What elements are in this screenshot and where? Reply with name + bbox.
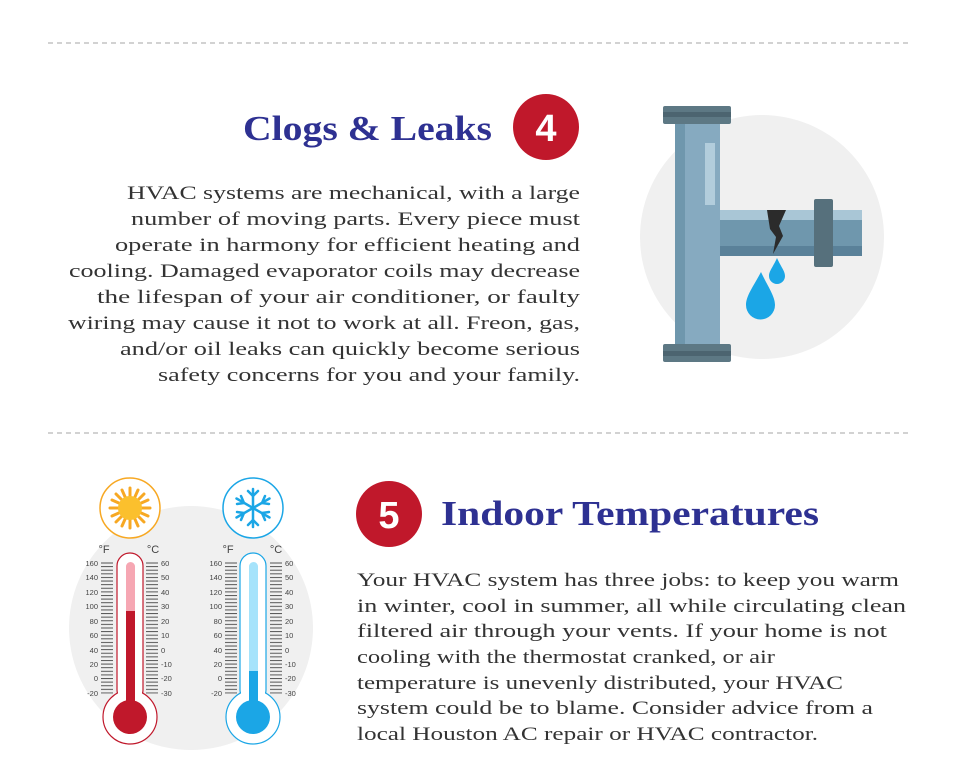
- thermometer: cold: 10: [285, 631, 293, 640]
- thermometer: hot: 0: [161, 646, 165, 655]
- thermometer: hot: 30: [161, 602, 169, 611]
- thermometer: hot: 20: [161, 617, 169, 626]
- thermometer: cold: 30: [285, 602, 293, 611]
- thermometer: cold: 120: [209, 588, 222, 597]
- text block: clogs & leaks: the lifespan of your air conditioner, or faulty: [97, 287, 581, 308]
- thermometer: cold: 160: [209, 559, 222, 568]
- badge 4: [513, 94, 579, 160]
- thermometer: hot: °C: [147, 544, 159, 556]
- text block: indoor temperatures: filtered air through your vents. If your home is not: [357, 621, 888, 642]
- thermometer: cold: 80: [214, 617, 222, 626]
- text block: indoor temperatures: [357, 570, 907, 745]
- thermometer: cold: °F: [222, 544, 234, 556]
- thermometer: cold: -10: [285, 660, 296, 669]
- thermometer: cold: 140: [209, 573, 222, 582]
- thermometer: hot: -20: [87, 689, 98, 698]
- thermometer: hot: 140: [85, 573, 98, 582]
- thermometer: hot: 160: [85, 559, 98, 568]
- heading: Clogs & Leaks: Clogs & Leaks: [243, 109, 492, 148]
- thermometer: cold: -20: [211, 689, 222, 698]
- thermometer: cold: 40: [285, 588, 293, 597]
- thermometer: cold: 100: [209, 602, 222, 611]
- thermometer: cold: 60: [285, 559, 293, 568]
- thermometer: hot: 100: [85, 602, 98, 611]
- thermometer: hot: 60: [161, 559, 169, 568]
- badge 4: 4: [535, 108, 557, 150]
- thermometer: hot: °F: [98, 544, 110, 556]
- thermometer: cold: 0: [218, 674, 222, 683]
- badge 5: 5: [378, 495, 400, 537]
- icon: sun: [100, 478, 160, 538]
- thermometer: hot: 0: [94, 674, 98, 683]
- text block: clogs & leaks: wiring may cause it not to work at all. Freon, gas,: [68, 313, 580, 334]
- thermometer: cold: 0: [285, 646, 289, 655]
- text block: clogs & leaks: cooling. Damaged evaporator coils may decrease: [69, 261, 580, 282]
- icon: water drops: [746, 258, 785, 320]
- text block: indoor temperatures: Your HVAC system has three jobs: to keep you warm: [357, 570, 899, 591]
- thermometer: cold: [209, 544, 296, 744]
- text block: indoor temperatures: cooling with the thermostat cranked, or air: [357, 647, 776, 668]
- thermometer: hot: [85, 544, 172, 744]
- thermometer: hot: -10: [161, 660, 172, 669]
- thermometer: hot: 120: [85, 588, 98, 597]
- thermometer: hot: 10: [161, 631, 169, 640]
- thermometer: hot: 20: [90, 660, 98, 669]
- text block: clogs & leaks: [68, 183, 581, 386]
- thermometer: hot: 50: [161, 573, 169, 582]
- thermometer: hot: -20: [161, 674, 172, 683]
- icon: snowflake: [223, 478, 283, 538]
- heading: Indoor Temperatures: Indoor Temperatures: [441, 494, 819, 533]
- badge 5: [356, 481, 422, 547]
- thermometer: hot: 80: [90, 617, 98, 626]
- thermometer: cold: °C: [270, 544, 282, 556]
- text block: indoor temperatures: system could be to blame. Consider advice from a: [357, 698, 874, 719]
- thermometer: cold: 50: [285, 573, 293, 582]
- text block: indoor temperatures: local Houston AC repair or HVAC contractor.: [357, 724, 818, 745]
- text block: clogs & leaks: and/or oil leaks can quickly become serious: [120, 339, 580, 360]
- thermometer: hot: 40: [90, 646, 98, 655]
- thermometer: cold: 40: [214, 646, 222, 655]
- thermometer: cold: 60: [214, 631, 222, 640]
- thermometer: cold: -30: [285, 689, 296, 698]
- thermometer: cold: 20: [214, 660, 222, 669]
- thermometer: cold: 20: [285, 617, 293, 626]
- icon: thermometers: [69, 478, 313, 750]
- icon: leaking pipe: [640, 106, 884, 362]
- text block: indoor temperatures: temperature is unevenly distributed, your HVAC: [357, 673, 843, 694]
- text block: indoor temperatures: in winter, cool in summer, all while circulating clean: [357, 596, 907, 617]
- text block: clogs & leaks: safety concerns for you and your family.: [158, 365, 580, 386]
- thermometer: hot: -30: [161, 689, 172, 698]
- text block: clogs & leaks: number of moving parts. Every piece must: [131, 209, 581, 230]
- text block: clogs & leaks: HVAC systems are mechanical, with a large: [127, 183, 580, 204]
- thermometer: hot: 60: [90, 631, 98, 640]
- thermometer: cold: -20: [285, 674, 296, 683]
- thermometer: hot: 40: [161, 588, 169, 597]
- text block: clogs & leaks: operate in harmony for efficient heating and: [115, 235, 581, 256]
